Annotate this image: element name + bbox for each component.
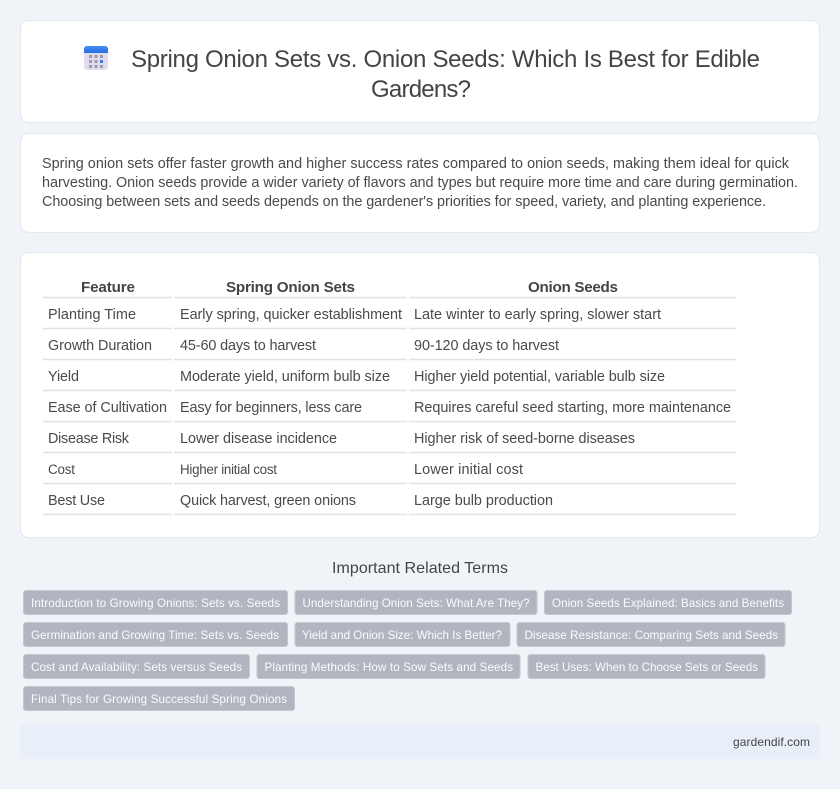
intro text [42,156,798,210]
panel: comparison table [20,252,820,538]
row: cost: Lower initial cost [414,462,523,478]
table header [81,279,618,296]
tag: Introduction to Growing Onions: Sets vs. Seeds [31,597,280,610]
heading: related terms: Important Related Terms [332,560,508,577]
tag [517,622,785,646]
row: growth duration: Growth Duration [48,338,152,354]
row: best use: Best Use [48,493,105,509]
title: Gardens? [371,76,471,103]
tag [24,654,250,678]
row: yield: Higher yield potential, variable bulb size [414,369,665,385]
tag: Onion Seeds Explained: Basics and Benefits [552,597,784,610]
tag: Understanding Onion Sets: What Are They? [302,597,530,610]
tag: Cost and Availability: Sets versus Seeds [31,661,242,674]
row: yield: Moderate yield, uniform bulb size [180,369,390,385]
tag: Yield and Onion Size: Which Is Better? [302,629,503,642]
row: yield [48,369,665,385]
table header: Spring Onion Sets [226,279,355,296]
tag [24,590,288,614]
row: cost [48,462,523,478]
row: cost: Higher initial cost [180,462,277,477]
row: ease of cultivation [48,400,731,416]
row: best use: Quick harvest, green onions [180,493,356,509]
intro text: Choosing between sets and seeds depends on the gardener's priorities for speed, variety, and planting experience. [42,194,766,210]
title [131,46,760,103]
tag [295,590,537,614]
row: planting time: Planting Time [48,307,136,323]
row: disease risk: Lower disease incidence [180,431,337,447]
table header: Onion Seeds [528,279,618,296]
row: planting time [48,307,661,323]
row: growth duration: 45-60 days to harvest [180,338,316,354]
row: growth duration: 90-120 days to harvest [414,338,559,354]
row: best use: Large bulb production [414,493,553,509]
row: planting time: Late winter to early spring, slower start [414,307,661,323]
footer: gardendif.com [733,735,810,749]
related term tags [24,590,792,710]
tag [528,654,765,678]
row: disease risk [48,431,635,447]
row: ease of cultivation: Ease of Cultivation [48,400,167,416]
row: growth duration [48,338,559,354]
row: ease of cultivation: Easy for beginners, less care [180,400,362,416]
tag: Final Tips for Growing Successful Spring Onions [31,693,287,706]
tag: Germination and Growing Time: Sets vs. Seeds [31,629,279,642]
tag [257,654,520,678]
tag [295,622,510,646]
row: best use [48,493,553,509]
tag [544,590,792,614]
intro text: harvesting. Onion seeds provide a wider variety of flavors and types but require more time and care during germination. [42,175,798,191]
footer [20,725,820,759]
row: disease risk: Higher risk of seed-borne diseases [414,431,635,447]
row: disease risk: Disease Risk [48,431,130,447]
tag: Best Uses: When to Choose Sets or Seeds [536,661,758,674]
tag [24,622,288,646]
row: planting time: Early spring, quicker establishment [180,307,402,323]
panel: introduction [20,134,820,232]
tag: Planting Methods: How to Sow Sets and Seeds [264,661,513,674]
title: Spring Onion Sets vs. Onion Seeds: Which Is Best for Edible [131,46,760,73]
panel: header [20,20,820,122]
table header: Feature [81,279,135,296]
icon: calendar [84,46,108,70]
tag [24,686,294,710]
intro text: Spring onion sets offer faster growth and higher success rates compared to onion seeds, making them ideal for quick [42,156,790,172]
tag: Disease Resistance: Comparing Sets and Seeds [524,629,778,642]
row: cost: Cost [48,462,75,477]
row: ease of cultivation: Requires careful seed starting, more maintenance [414,400,731,416]
row: yield: Yield [48,369,79,385]
